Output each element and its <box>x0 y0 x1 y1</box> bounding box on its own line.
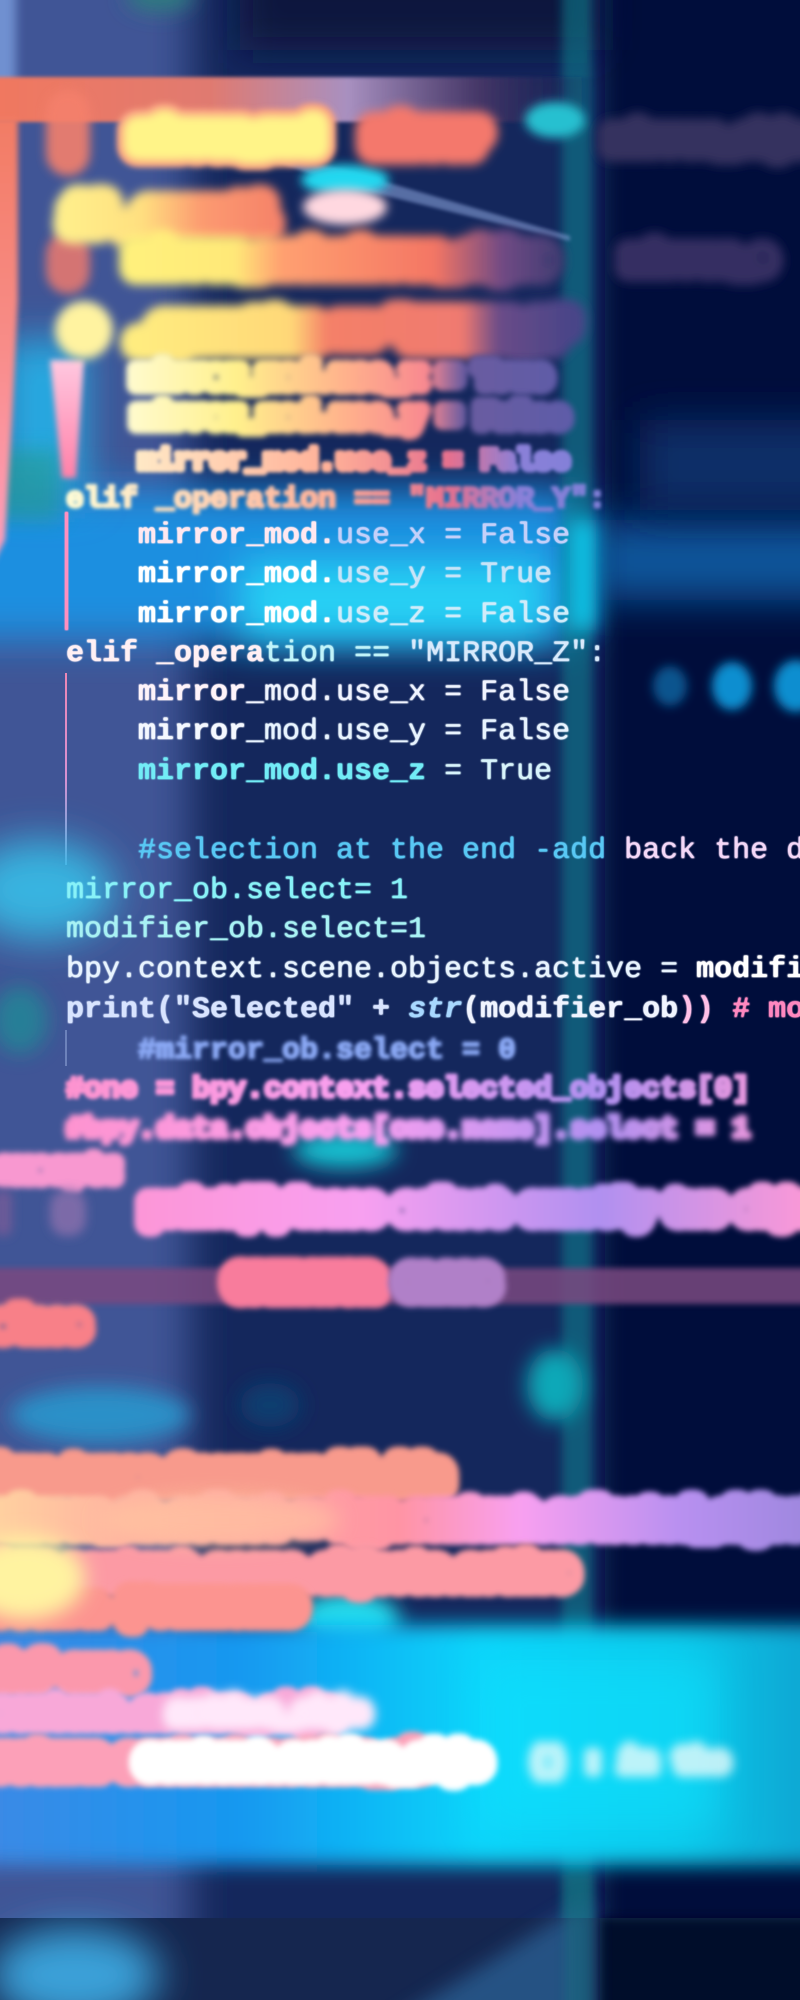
code lines: bright white blurred block on cyan: active_obje <box>170 1697 368 1731</box>
code lines: large blurred salmon block: bpy.types.Operator.bl_idn <box>0 1461 444 1495</box>
code lines: heavily blurred top block: mirror <box>373 122 481 156</box>
code lines: slightly soft block: bpy.context.scene.objects.active = modifi <box>66 953 800 987</box>
glow: blue light band behind focused code <box>0 340 800 640</box>
code lines: bright white blurred block on cyan: context.active_obje <box>142 1746 484 1780</box>
light streak across the top <box>250 102 585 241</box>
code lines: fading blur below focus: #one = bpy.context.selected_objects[0] <box>66 1073 750 1107</box>
code lines: slightly soft block: mirror_mod.use_z = False <box>138 598 570 632</box>
code lines: fading blur below focus: #bpy.data.objects[one.name].select = 1 <box>66 1113 750 1147</box>
code lines: slightly soft block <box>66 519 800 1027</box>
code lines: large blurred salmon block: bpy.context.scene.objects.active <box>0 1557 570 1591</box>
code lines: slightly soft block: mirror_mod.use_y = True <box>138 558 552 592</box>
code lines: heavily blurred top block: mirror_o <box>627 244 771 278</box>
code lines: large blurred salmon block: return {'FINISHED <box>0 1593 300 1627</box>
code lines: fading blur below focus <box>65 1030 750 1147</box>
code lines: slightly soft block: #selection at the end -add back the d <box>138 834 800 868</box>
bokeh: blue patches on the left and centre <box>0 840 583 1648</box>
code lines: fading blur below focus: #mirror_ob.select = 0 <box>138 1034 516 1068</box>
panel: bright cyan band near the bottom <box>0 1625 800 1865</box>
code lines: bright white blurred block on cyan: context.active_obje <box>0 1697 336 1731</box>
code lines: large blurred salmon block <box>0 1461 800 1627</box>
bokeh: dots right of the code <box>653 660 800 712</box>
code lines: heavily blurred top block: elif _operation == "MIRROR_Y": <box>66 483 606 517</box>
code lines: bright white blurred block on cyan <box>0 1657 728 1780</box>
code lines: slightly soft block: mirror_mod.use_x = False <box>138 519 570 553</box>
code lines: except block, blurred: print("please select exactly two obje <box>146 1193 800 1227</box>
code lines: slightly soft block: modifier_ob.select=1 <box>66 913 426 947</box>
code lines: bright white blurred block on cyan: () : in the <box>530 1746 728 1780</box>
code lines: slightly soft block: mirror_mod.use_z = True <box>138 755 552 789</box>
code lines: heavily blurred top block: mirror_mod.use_z = False <box>138 445 570 479</box>
section divider: operator classes, blurred <box>0 1268 800 1344</box>
code lines: heavily blurred top block: mirror_mod.mirror_objec <box>135 244 549 278</box>
code lines: slightly soft block: mirror_ob.select= 1 <box>66 874 408 908</box>
code lines: heavily blurred top block: _operation == "MIRROR_X" <box>138 316 571 350</box>
code lines: slightly soft block: elif _operation == "MIRROR_Z": <box>66 637 606 671</box>
section divider: operator classes, blurred: CLASS <box>402 1268 492 1302</box>
footer: dark strip with soft reflections <box>0 1875 800 2000</box>
top code frame: salmon band and left bar <box>0 77 600 570</box>
code lines: heavily blurred top block: mirror_mod.use_y = False <box>135 401 567 435</box>
code lines: slightly soft block: mirror_mod.use_y = False <box>138 715 570 749</box>
code lines: slightly soft block: mirror_mod.use_x = False <box>138 676 570 710</box>
code lines: slightly soft block: print("Selected" + str(modifier_ob)) # mo <box>66 993 800 1027</box>
code lines: heavily blurred top block: mirror_mod <box>137 122 317 156</box>
code lines: heavily blurred top block: mirror_mod.use_x = True <box>135 361 549 395</box>
light stripe: vertical cyan beam <box>562 0 596 2000</box>
code lines: heavily blurred top block <box>55 122 800 517</box>
code lines: bright white blurred block on cyan: return context.active_ob <box>0 1746 426 1780</box>
code lines: except block, blurred <box>0 1154 800 1236</box>
code lines: heavily blurred top block: mirror_mod <box>137 122 317 156</box>
indent rule: dashed vertical guide <box>65 512 68 865</box>
section divider: operator classes, blurred: OPERATOR <box>232 1268 376 1302</box>
code lines: heavily blurred top block: if _operati <box>70 201 268 235</box>
